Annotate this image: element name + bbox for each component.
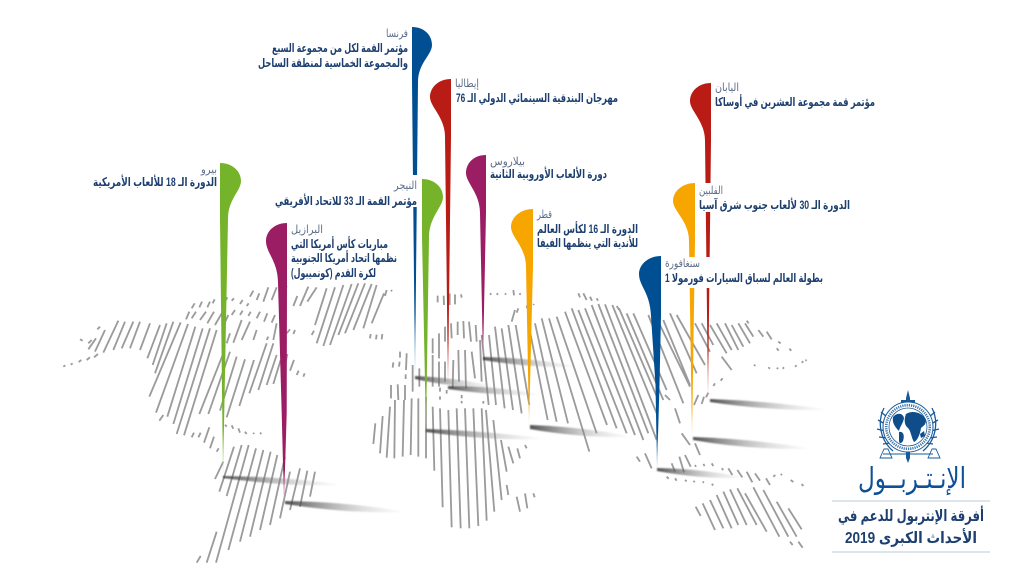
emblem sword xyxy=(906,390,910,463)
pin: Philippines xyxy=(673,183,695,438)
label: France xyxy=(258,28,408,71)
pin: Japan xyxy=(690,83,711,400)
label: Japan xyxy=(715,82,875,110)
label: Italy: مهرجان البندقية السينمائي الدولي الـ 76 xyxy=(456,91,618,106)
world map stripes xyxy=(63,283,807,563)
text backgrounds xyxy=(250,175,853,288)
label: Brazil: نظمها اتحاد أمريكا الجنوبية xyxy=(291,250,397,266)
label: Philippines: الدورة الـ 30 لألعاب جنوب شرق آسيا xyxy=(699,197,850,213)
label: Niger xyxy=(275,180,417,209)
label: Belarus xyxy=(490,156,607,182)
label: France: مؤتمر القمة لكل من مجموعة السبع xyxy=(272,41,408,56)
label: Brazil: لكرة القدم (كونميبول) xyxy=(291,266,376,281)
map: Africa xyxy=(373,397,535,528)
label: Japan: اليابان xyxy=(715,82,739,94)
label: Qatar xyxy=(536,209,638,250)
pin: Brazil xyxy=(266,223,287,503)
label: Belarus: بيلاروس xyxy=(490,156,525,168)
pin shadows xyxy=(223,357,830,512)
pin: Niger xyxy=(422,179,443,431)
pin: Belarus xyxy=(466,155,486,359)
label: Niger: مؤتمر القمة الـ 33 للاتحاد الأفريقي xyxy=(275,193,417,209)
label: Niger: النيجر xyxy=(393,180,417,192)
emblem wreath xyxy=(877,408,939,451)
map: Europe xyxy=(391,293,483,404)
pin: Singapore xyxy=(639,256,661,470)
label: Singapore: سنغافورة xyxy=(665,258,700,270)
wordmark: الإنـتـربــول xyxy=(858,463,966,496)
label: Singapore: بطولة العالم لسباق السيارات فورمولا 1 xyxy=(665,271,823,286)
panel: caption xyxy=(832,501,990,552)
label: France: والمجموعة الخماسية لمنطقة الساحل xyxy=(258,56,408,71)
map: Asia and Oceania xyxy=(482,290,807,548)
label: Qatar: للأندية التي ينظمها الفيفا xyxy=(537,235,638,250)
map: Americas xyxy=(63,283,392,563)
pin: Qatar xyxy=(511,209,533,425)
label: Italy xyxy=(455,78,618,106)
label: Belarus: دورة الألعاب الأوروبية الثانية xyxy=(490,166,607,182)
label: Brazil xyxy=(291,224,397,281)
label: Brazil: البرازيل xyxy=(291,224,323,236)
pin: France xyxy=(412,27,432,378)
emblem ring xyxy=(883,402,933,452)
label: Japan: مؤتمر قمة مجموعة العشرين في أوساكا xyxy=(715,94,875,110)
label: France: فرنسا xyxy=(386,28,408,40)
emblem scales xyxy=(880,449,940,458)
emblem globe continents xyxy=(893,412,926,443)
label: Italy: إيطاليا xyxy=(455,78,479,90)
label: Qatar: الدورة الـ 16 لكأس العالم xyxy=(537,221,638,237)
label: Singapore xyxy=(665,258,823,286)
panel: caption: الأحداث الكبرى 2019 xyxy=(845,528,977,547)
pin: Italy xyxy=(430,79,451,388)
pin: Peru xyxy=(220,163,241,477)
label: Peru: الدورة الـ 18 للألعاب الأمريكية xyxy=(93,174,217,190)
label: Peru xyxy=(93,164,217,190)
label: Brazil: مباريات كأس أمريكا التي xyxy=(291,236,388,251)
icon: Interpol emblem xyxy=(877,390,940,463)
label: Peru: بيرو xyxy=(200,164,217,176)
label: Philippines xyxy=(699,185,850,213)
pins xyxy=(220,27,711,503)
label: Philippines: الفلبين xyxy=(699,185,723,197)
label: Qatar: قطر xyxy=(536,209,552,221)
